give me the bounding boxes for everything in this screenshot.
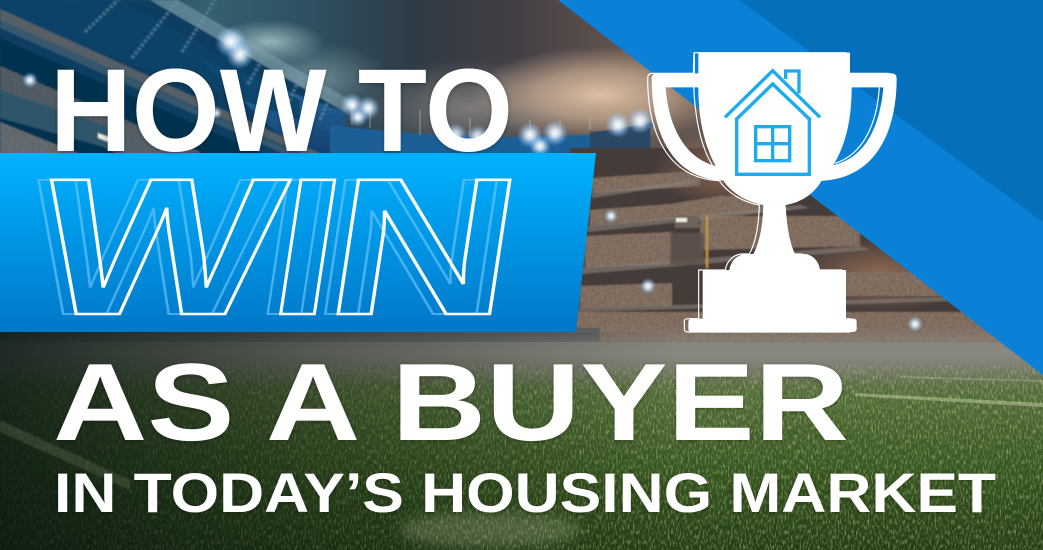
WIN ghost outline: I [246, 137, 344, 355]
trophy icon [648, 53, 897, 332]
WIN main outline [25, 137, 534, 356]
blue diagonal panel, top right [558, 0, 1043, 375]
WIN ghost outline: N [302, 137, 521, 356]
left stand strip below banner [0, 328, 600, 352]
lower tier [0, 66, 200, 160]
distant glass band [330, 122, 653, 160]
upper tier crowd and rail [0, 9, 330, 166]
stands, right [570, 132, 1043, 350]
WIN main outline: W [25, 138, 298, 356]
darker diagonal band [739, 0, 1043, 222]
dark wedge [0, 38, 300, 170]
sky [0, 0, 1043, 175]
WIN main outline: N [315, 137, 534, 356]
headline: HOW TO: HOW TO [50, 45, 513, 177]
house icon [725, 71, 820, 176]
subheading: in today's housing market: IN TODAY’S HOUSING MARKET [54, 461, 996, 524]
stadium lights [22, 26, 923, 332]
corner flag [706, 216, 708, 268]
WIN ghost outline: W [12, 138, 285, 356]
white sign [98, 133, 122, 147]
banner [0, 153, 596, 332]
stadium roof and upper tiers, left [0, 0, 350, 170]
roof trusses [85, 0, 332, 120]
roof support posts [352, 100, 640, 135]
trophy offset outline [648, 53, 893, 332]
field [0, 326, 1043, 550]
WIN ghost outline [12, 137, 521, 356]
trophy body with handle openings [652, 53, 897, 332]
headline: AS A BUYER: AS A BUYER [53, 341, 849, 464]
headline word: WIN [12, 137, 534, 356]
WIN main outline: I [259, 137, 357, 355]
